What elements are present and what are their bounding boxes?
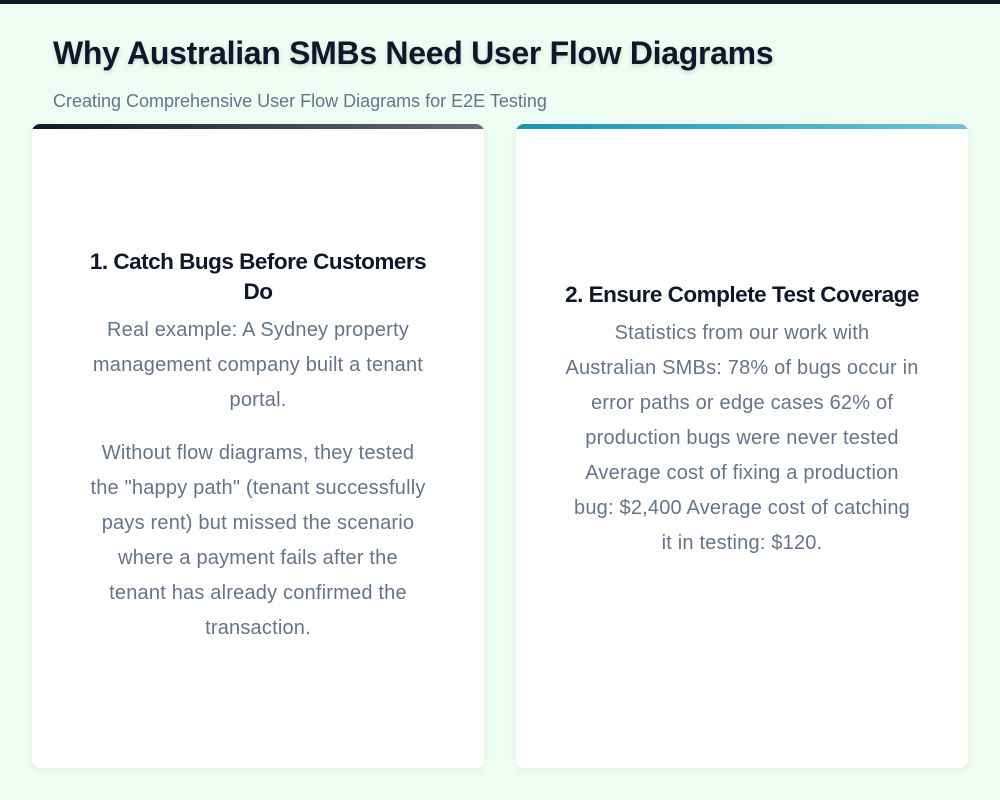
text: scenario: the "happy path" (tenant successfully [90,477,426,499]
heading: catch bugs: Do [244,279,272,304]
panel: catch bugs [32,124,484,768]
heading: catch bugs [90,249,426,304]
text: statistics: it in testing: $120. [662,532,822,554]
text: scenario: transaction. [205,617,311,639]
heading: test coverage: 2. Ensure Complete Test Coverage [565,282,919,307]
subtitle: Creating Comprehensive User Flow Diagrams for E2E Testing [53,91,547,111]
text: scenario: Without flow diagrams, they tested [102,442,414,464]
text: statistics: error paths or edge cases 62% of [591,392,893,414]
panel: test coverage [516,124,968,768]
text: statistics: Average cost of fixing a production [585,462,899,484]
text: scenario: tenant has already confirmed the [109,582,407,604]
text: example: portal. [230,389,286,411]
text: scenario: pays rent) but missed the scenario [102,512,414,534]
heading: catch bugs: 1. Catch Bugs Before Customers [90,249,426,274]
title: Why Australian SMBs Need User Flow Diagrams [53,35,773,71]
text: example [93,319,423,411]
text: statistics: Statistics from our work with [615,322,869,344]
text: statistics: Australian SMBs: 78% of bugs occur in [565,357,919,379]
text: example: management company built a tenant [93,354,423,376]
text: statistics [565,322,919,554]
text: statistics: bug: $2,400 Average cost of catching [574,497,910,519]
text: example: Real example: A Sydney property [107,319,409,341]
text: scenario: where a payment fails after the [118,547,398,569]
text: statistics: production bugs were never tested [585,427,899,449]
text: scenario [90,442,426,639]
